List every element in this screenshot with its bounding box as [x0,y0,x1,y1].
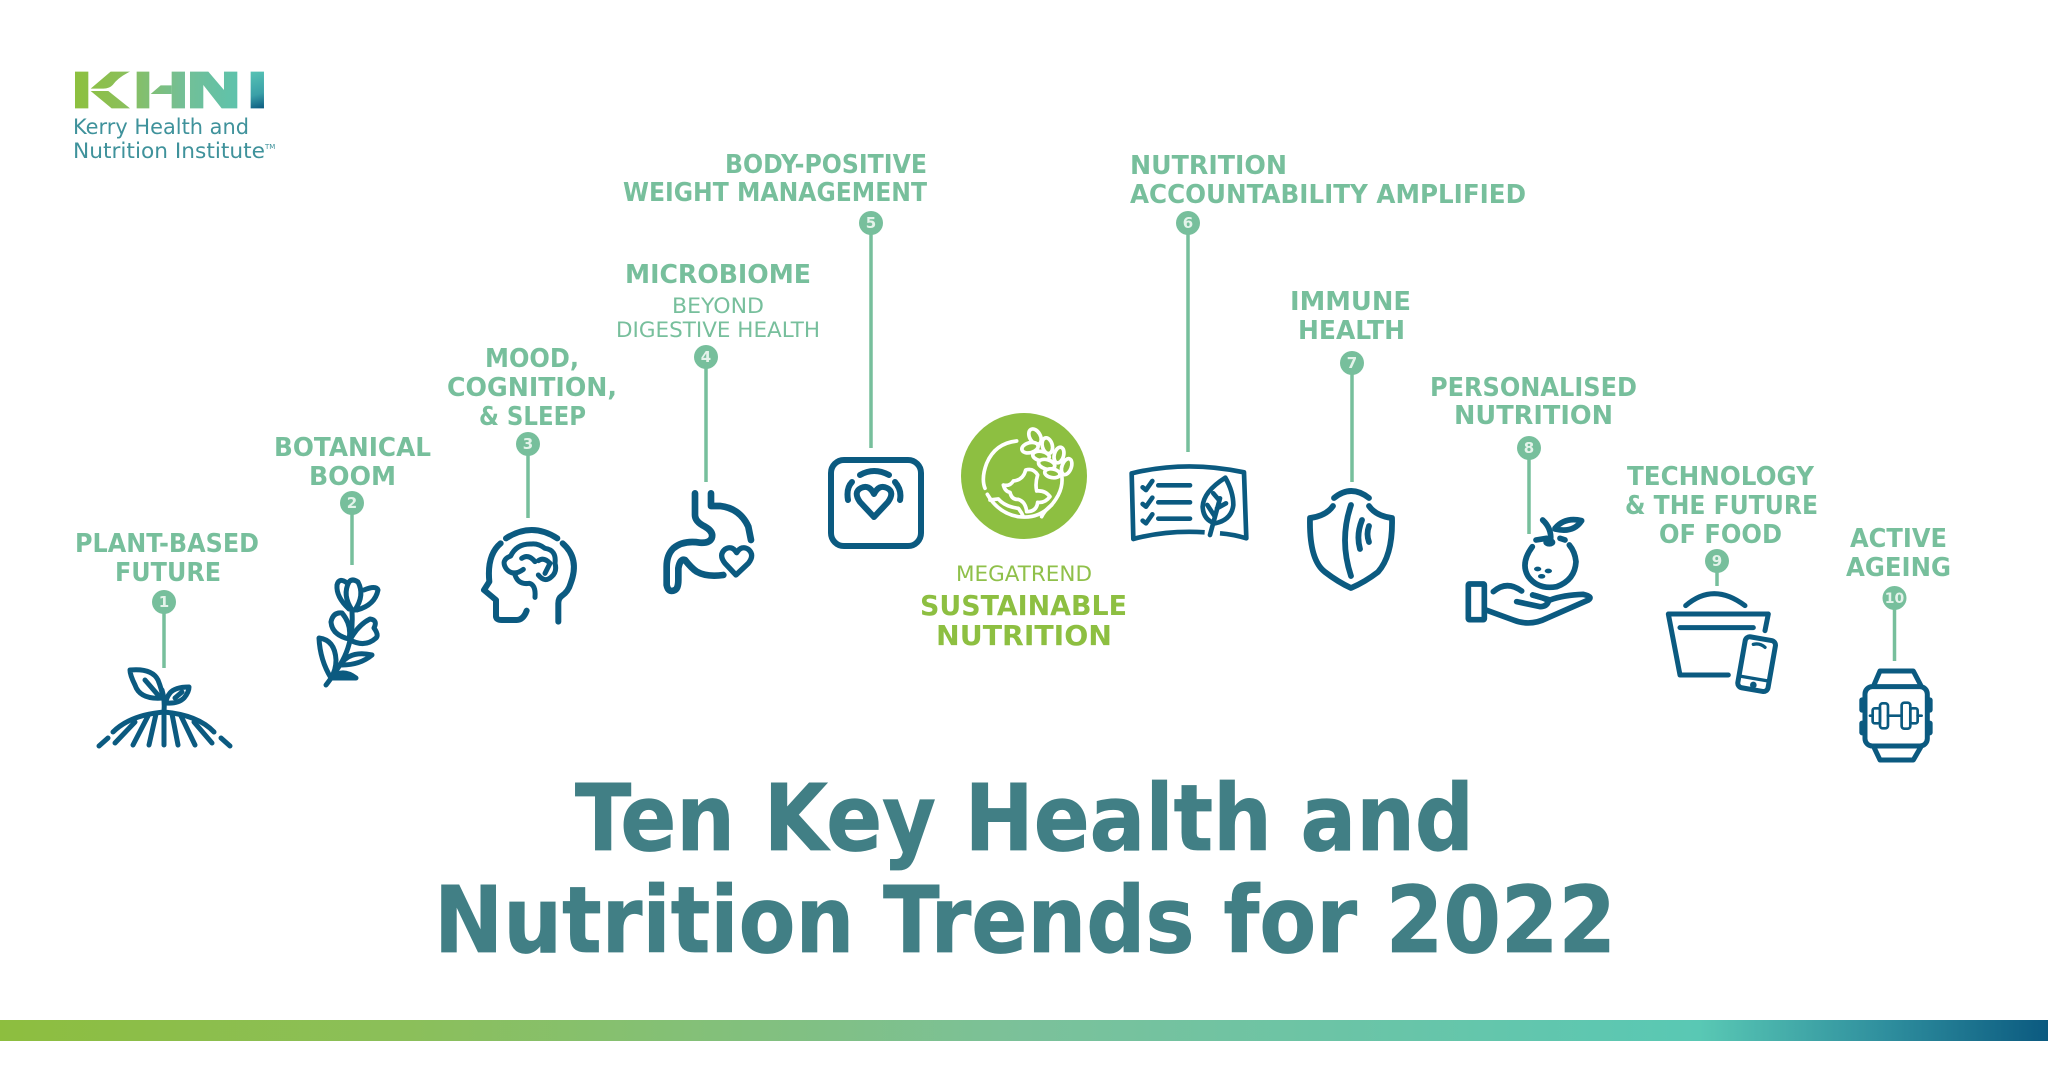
number pin: 7 [1347,354,1357,372]
label [75,529,259,588]
label: WEIGHT MANAGEMENT [623,178,927,208]
number pin [1340,351,1364,482]
label: BODY-POSITIVE [725,150,927,180]
logo text line 1: Kerry Health and [73,115,249,139]
trend 10: active ageing [1846,524,1951,760]
number pin [859,211,883,448]
label [623,150,927,208]
number pin: 8 [1524,439,1534,457]
title [434,765,1616,974]
number pin: 6 [1183,214,1193,232]
label: DIGESTIVE HEALTH [616,318,820,343]
icon: hand holding fruit [1468,520,1590,623]
title line 2: Nutrition Trends for 2022 [434,867,1616,974]
trend 6: nutrition accountability amplified [1130,151,1526,539]
icon: head with brain [484,530,574,622]
number pin: 2 [347,494,357,512]
trend 9: technology and the future of food [1625,462,1818,692]
logo text line 2: Nutrition Institute [73,139,265,163]
trend 8: personalised nutrition [1430,373,1637,623]
label [1290,287,1411,346]
icon: shield [1310,491,1392,588]
number pin [1517,436,1541,534]
label: sustainable nutrition: NUTRITION [936,620,1112,652]
trend 2: botanical boom [274,433,431,685]
icon: stomach with heart [667,493,752,591]
label: PERSONALISED [1430,373,1637,403]
number pin [152,590,176,668]
logo mark: KHNI letters [75,72,264,108]
number pin [1882,586,1906,661]
trend 5: body-positive weight management [623,150,927,546]
label: FUTURE [115,558,221,588]
icon: sprouting plant [99,670,230,746]
trend 1: plant-based future [75,529,259,746]
label [1430,373,1637,431]
icon: smartwatch with dumbbell [1859,671,1933,760]
label [1625,462,1818,550]
label [1130,151,1526,210]
icon: shopping basket and phone [1668,594,1776,692]
label: OF FOOD [1659,520,1782,550]
number pin: 10 [1885,591,1904,607]
label [616,260,820,343]
label: NUTRITION [1130,151,1287,181]
label: PLANT-BASED [75,529,259,559]
label: & SLEEP [479,402,586,432]
label [447,344,617,432]
label: IMMUNE [1290,287,1411,317]
gradient footer bar [0,1020,2048,1041]
number pin [1705,549,1729,586]
icon: globe with wheat on green circle [961,413,1087,539]
label: BEYOND [672,294,764,319]
icon: weighing scale with heart [831,460,921,546]
number pin: 9 [1712,552,1722,570]
icon: label checklist with leaf [1132,466,1246,539]
label [1846,524,1951,583]
number pin [694,345,718,482]
number pin: 4 [701,348,711,366]
label: COGNITION, [447,373,617,403]
number pin: 5 [866,214,876,232]
label: & THE FUTURE [1625,491,1818,521]
label: sustainable nutrition [920,590,1127,652]
label: AGEING [1846,553,1951,583]
label [274,433,431,492]
megatrend: sustainable nutrition [920,413,1127,652]
label: BOOM [309,462,396,492]
number pin [516,432,540,518]
label: HEALTH [1298,316,1405,346]
logo: KHNI Kerry Health and Nutrition Institute [73,72,275,163]
label: ACCOUNTABILITY AMPLIFIED [1130,180,1526,210]
label: MICROBIOME [625,260,811,290]
trend 4: microbiome beyond digestive health [616,260,820,591]
icon: botanical flower sprig [319,580,378,685]
logo trademark: TM [264,143,275,151]
number pin [340,491,364,565]
number pin: 3 [523,435,533,453]
number pin [1176,211,1200,452]
label: sustainable nutrition: SUSTAINABLE [920,590,1127,622]
title line 1: Ten Key Health and [575,765,1474,872]
label: NUTRITION [1454,401,1613,431]
number pin: 1 [159,593,169,611]
label: megatrend: MEGATREND [956,562,1092,587]
label: TECHNOLOGY [1627,462,1815,492]
trend 3: mood, cognition and sleep [447,344,617,622]
label: ACTIVE [1850,524,1947,554]
label: BOTANICAL [274,433,431,463]
label: MOOD, [485,344,579,374]
trend 7: immune health [1290,287,1411,588]
